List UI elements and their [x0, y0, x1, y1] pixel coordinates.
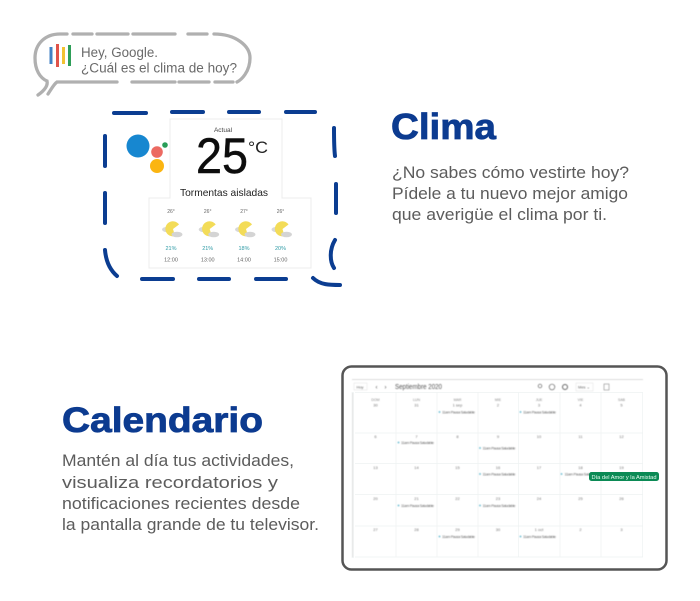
day numbers: 14 — [414, 465, 419, 470]
day numbers — [373, 402, 624, 532]
bubble outline — [35, 34, 250, 95]
calendar events: 11am Pausa Saludable — [523, 410, 556, 414]
text block: Clima description: ¿No sabes cómo vestirte hoy? — [392, 163, 629, 182]
hourly forecast: 12:00: 21% — [165, 246, 177, 252]
hourly forecast: 13:00 — [199, 209, 219, 264]
calendar toolbar — [352, 380, 643, 391]
card background — [149, 119, 311, 268]
highlighted event: Día del Amor y la Amistad — [589, 472, 659, 481]
weekday labels: JUE — [536, 398, 543, 402]
day numbers: 4 — [579, 402, 582, 408]
text block: Calendario description: visualiza recordatorios y — [62, 473, 279, 492]
hourly forecast: 15:00: 26° — [277, 209, 284, 215]
hourly forecast: 15:00: 15:00 — [274, 258, 287, 264]
calendar events: 11am Pausa Saludable — [442, 410, 475, 414]
text block: Clima description: Pídele a tu nuevo mejor amigo — [392, 184, 628, 203]
day numbers: 30 — [373, 402, 378, 408]
day numbers: 2 — [579, 527, 582, 532]
hourly forecast: 15:00 — [272, 209, 292, 264]
highlighted event: Día del Amor y la Amistad: Día del Amor y la Amistad — [592, 475, 656, 481]
degree unit: °C — [248, 138, 268, 157]
calendar toolbar: Septiembre 2020 — [395, 384, 442, 391]
calendar events: 11am Pausa Saludable — [482, 446, 516, 450]
day numbers: 2 — [497, 402, 500, 408]
day numbers: 26 — [619, 496, 624, 501]
current label: Actual — [214, 127, 233, 134]
calendar events: 11am Pausa Saludable — [482, 504, 516, 508]
hourly forecast: 14:00 — [235, 209, 256, 264]
calendar screen — [342, 366, 666, 570]
weekday labels — [371, 398, 626, 402]
day numbers: 1 oct — [535, 527, 544, 532]
hourly forecast: 12:00: 26° — [167, 209, 175, 215]
day numbers: 10 — [537, 434, 542, 439]
day numbers: 23 — [496, 496, 501, 501]
heading: Clima: Clima — [391, 106, 497, 147]
calendar toolbar: Mes ⌄ — [578, 384, 590, 390]
temperature: 25 — [196, 128, 248, 184]
day numbers: 30 — [496, 527, 501, 532]
calendar events: 11am Pausa Saludable — [442, 535, 475, 539]
day numbers: 20 — [373, 496, 378, 501]
day numbers: 5 — [620, 402, 623, 408]
day numbers: 31 — [414, 402, 419, 408]
day numbers: 24 — [537, 496, 542, 501]
calendar events: 11am Pausa Saludable — [401, 441, 434, 445]
text block: Calendario description: la pantalla grande de tu televisor. — [62, 515, 319, 534]
day numbers: 18 — [578, 465, 583, 470]
hourly forecast: 12:00 — [162, 209, 182, 264]
day numbers: 8 — [456, 434, 459, 439]
day numbers: 17 — [537, 465, 542, 470]
calendar toolbar: Hoy — [356, 384, 364, 390]
day numbers: 1 sep — [453, 402, 463, 408]
weekday labels: VIE — [578, 398, 584, 402]
screen frame — [342, 366, 666, 570]
hourly forecast: 14:00: 27° — [240, 209, 248, 215]
day numbers: 3 — [620, 527, 623, 532]
bubble text — [81, 45, 237, 76]
speech bubble: voice command — [35, 34, 250, 95]
day numbers: 12 — [619, 434, 624, 439]
day numbers: 3 — [538, 402, 541, 408]
icon: Google Assistant dots — [126, 134, 168, 173]
hourly forecast: 13:00: 21% — [202, 246, 213, 252]
calendar grid — [352, 392, 643, 558]
weather card — [149, 119, 311, 268]
weekday labels: DOM — [371, 398, 380, 402]
dashed blue frame around weather — [105, 112, 340, 285]
calendar events: 11am Pausa Saludable — [523, 535, 556, 539]
text block: Clima description: que averigüe el clima por ti. — [392, 205, 607, 224]
day numbers: 13 — [373, 465, 378, 470]
icon: voice bars — [51, 44, 70, 67]
text block: Clima description — [392, 163, 629, 224]
calendar events: 11am Pausa Salu — [564, 472, 590, 476]
calendar toolbar: ‹ — [376, 385, 378, 391]
condition: Tormentas aisladas — [180, 187, 268, 199]
hourly forecast: 14:00: 14:00 — [237, 258, 251, 264]
weekday labels: MIE — [495, 398, 502, 402]
hourly forecast: 13:00: 13:00 — [201, 258, 215, 264]
hourly forecast: 15:00: 20% — [275, 246, 286, 252]
day numbers: 29 — [455, 527, 460, 532]
text block: Calendario description: notificaciones recientes desde — [62, 494, 300, 513]
day numbers: 9 — [497, 434, 500, 439]
hourly forecast: 13:00: 26° — [204, 209, 211, 215]
day numbers: 28 — [414, 527, 419, 532]
hourly forecast: 12:00: 12:00 — [164, 258, 178, 264]
weekday labels: MAR — [454, 398, 462, 402]
hourly forecast: 14:00: 18% — [238, 246, 250, 252]
heading: Calendario: Calendario — [62, 401, 263, 440]
day numbers: 22 — [455, 496, 460, 501]
day numbers: 7 — [415, 434, 418, 439]
weekday labels: SAB — [618, 398, 626, 402]
day numbers: 19 — [619, 465, 624, 470]
day numbers: 25 — [578, 496, 583, 501]
text block: Calendario description — [62, 451, 319, 534]
calendar toolbar: › — [384, 385, 386, 391]
day numbers: 6 — [374, 434, 377, 439]
calendar events: 11am Pausa Saludable — [401, 504, 434, 508]
bubble text: Hey, Google. — [81, 45, 158, 60]
day numbers: 15 — [455, 465, 460, 470]
day numbers: 27 — [373, 527, 378, 532]
weekday labels: LUN — [413, 398, 420, 402]
day numbers: 11 — [578, 434, 583, 439]
bubble text: ¿Cuál es el clima de hoy? — [81, 60, 237, 76]
day numbers: 16 — [496, 465, 501, 470]
text block: Calendario description: Mantén al día tus actividades, — [62, 451, 294, 470]
day numbers: 21 — [414, 496, 419, 501]
calendar events — [398, 410, 590, 539]
calendar events: 11am Pausa Saludable — [482, 472, 516, 476]
